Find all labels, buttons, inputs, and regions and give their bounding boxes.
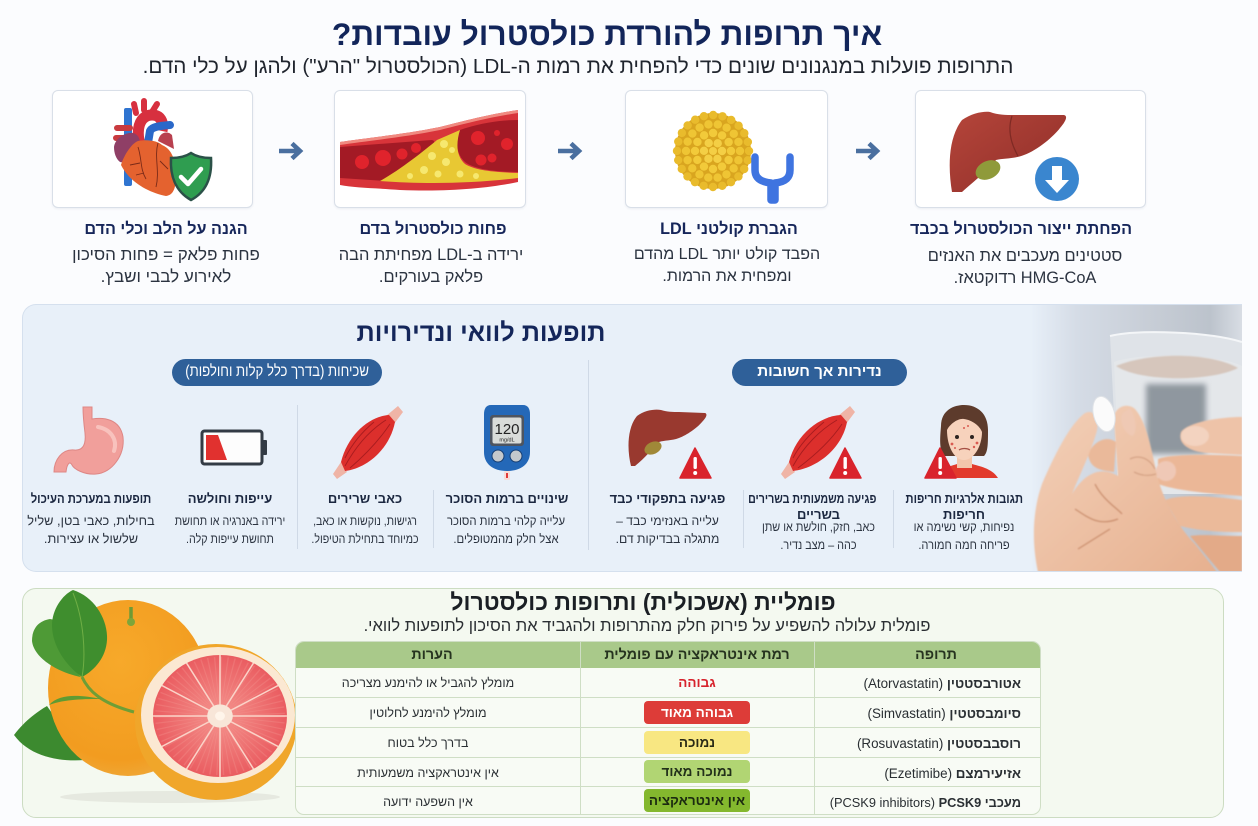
pill: rare	[732, 359, 907, 386]
table: grapefruit interactions: גבוהה	[678, 675, 716, 690]
effect: severe muscle damage text: כאב, חזק, חולשת או שתן	[762, 520, 875, 534]
table: grapefruit interactions: אין אינטראקציה משמעותית	[357, 766, 499, 780]
table: grapefruit interactions: רמת אינטראקציה עם פומלית	[604, 647, 790, 663]
effect: liver text: עלייה באנזימי כבד –	[616, 514, 719, 528]
step 3 text: הפבד קולט יותר LDL מהדם	[634, 246, 820, 263]
icon: glucose meter	[484, 405, 530, 480]
icon: stomach	[54, 406, 124, 475]
effect: allergy text: פריחה חמה חמורה.	[918, 538, 1010, 552]
arrow	[279, 142, 304, 160]
whole orange	[48, 600, 208, 776]
panel: side effects	[22, 304, 1242, 572]
glass	[1110, 332, 1242, 494]
row: ezetimibe: אזיעירמצם (Ezetimibe)	[884, 766, 1021, 781]
panel: grapefruit	[22, 588, 1224, 818]
effect: allergy heading: תגובות אלרגיות חריפות	[905, 491, 1023, 506]
table: grapefruit interactions: הערות	[411, 647, 453, 663]
step 4 text: HMG-CoA רדוקטאז.	[954, 269, 1096, 287]
arrow	[558, 142, 582, 160]
hand	[1034, 406, 1217, 572]
icon: glucose meter: 120	[494, 421, 520, 438]
table: grapefruit interactions: נמוכה	[679, 735, 715, 750]
step 2 text	[339, 246, 523, 286]
step 4 heading: הפחתת ייצור הכולסטרול בכבד	[910, 220, 1132, 238]
step 3 text	[634, 246, 820, 285]
back fingers	[1034, 406, 1242, 572]
grapefruit half	[135, 644, 297, 800]
pill	[1089, 394, 1119, 434]
effect: allergy text: נפיחות, קשי נשימה או	[914, 520, 1014, 534]
row: PCSK9 inhibitors: מעכבי PCSK9 (PCSK9 inhibitors)	[830, 795, 1021, 810]
effect: fatigue text	[175, 514, 285, 546]
table: grapefruit interactions: מומלץ להימנע לחלוטין	[369, 706, 487, 720]
icon: muscle	[333, 406, 403, 479]
subtitle: התרופות פועלות במנגנונים שונים כדי להפחית את רמות ה-LDL (הכולסטרול "הרע") ולהגן על כלי הדם.	[143, 55, 1013, 78]
step 2 text: פלאק בעורקים.	[379, 268, 483, 286]
icon: glucose meter: mg/dL	[499, 438, 515, 444]
effect: severe muscle damage heading	[749, 491, 877, 522]
table: grapefruit interactions: תרופה	[915, 647, 957, 663]
effect: severe muscle damage heading: בשריים	[797, 507, 840, 522]
effect: blood sugar text: עלייה קלהי ברמות הסוכר	[447, 514, 565, 528]
effect: liver heading: פגיעה בתפקודי כבד	[610, 491, 725, 506]
effect: blood sugar heading: שינויים ברמות הסוכר	[446, 491, 568, 506]
step 1 text	[72, 245, 260, 286]
effect: muscle pain text: כמיוחד בתחילת הטיפול.	[311, 532, 419, 546]
row: simvastatin: סיומבסטטין (Simvastatin)	[868, 706, 1021, 721]
step 1 text: פחות פלאק = פחות הסיכון	[72, 245, 260, 264]
icon: artery with plaque	[340, 110, 518, 190]
side effects heading: תופעות לוואי ונדירויות	[357, 319, 605, 347]
icon: liver with warning	[628, 410, 712, 479]
effect: fatigue text: תחושת עייפות קלה.	[186, 532, 274, 546]
step 1 heading: הגנה על הלב וכלי הדם	[84, 220, 248, 238]
effect: allergy heading: חריפות	[943, 507, 985, 522]
effect: muscle pain heading: כאבי שרירים	[328, 491, 402, 506]
table: grapefruit interactions: נמוכה מאוד	[662, 764, 732, 779]
step 3 heading: הגברת קולטני LDL	[660, 220, 798, 238]
grapefruit heading: פומליית (אשכולית) ותרופות כולסטרול	[450, 589, 836, 615]
icon: low battery	[200, 430, 267, 466]
shield	[171, 153, 211, 200]
effect: fatigue heading: עייפות וחולשה	[188, 491, 272, 506]
effect: digestive text: בחילות, כאבי בטן, שליל	[27, 513, 155, 528]
panel: step protect heart	[52, 90, 253, 208]
table: grapefruit interactions	[295, 641, 1041, 815]
step 1 text: לאירוע לבבי ושבץ.	[101, 267, 231, 286]
effect: severe muscle damage heading: פגיעה משמעותית בשרירים	[749, 491, 877, 506]
effect: allergy heading	[905, 491, 1023, 522]
back leaf	[14, 706, 85, 760]
effect: liver text	[616, 514, 719, 546]
icon: liver with down arrow	[950, 112, 1079, 201]
row: rosuvastatin: רוסבבסטטין (Rosuvastatin)	[857, 736, 1021, 751]
icon: LDL particle and receptor	[672, 110, 794, 204]
table header	[296, 642, 1042, 668]
table: grapefruit interactions: אין אינטראקציה	[649, 793, 745, 808]
icon: heart with shield	[113, 98, 212, 202]
step 4 text: סטטינים מעכבים את האנזים	[928, 247, 1122, 265]
panel: step LDL receptors	[625, 90, 828, 208]
effect: muscle pain text: רגישות, נוקשות או כאב,	[313, 514, 417, 528]
effect: digestive text	[27, 513, 155, 546]
illustration: grapefruit	[14, 590, 295, 803]
photo: hand holding pill and glass of water	[1033, 305, 1242, 571]
table: grapefruit interactions: בדרך כלל בטוח	[388, 736, 468, 750]
effect: digestive heading: תופעות במערכת העיכול	[31, 491, 151, 506]
effect: digestive text: שלשול או עצירות.	[44, 531, 138, 546]
effect: blood sugar text	[447, 514, 565, 546]
pill: common	[172, 359, 382, 386]
step 2 heading: פחות כולסטרול בדם	[359, 220, 507, 238]
arrow	[856, 142, 880, 160]
effect: fatigue text: ירידה באנרגיה או תחושת	[175, 514, 285, 528]
icon: face with rash and warning	[924, 405, 998, 479]
effect: blood sugar text: אצל חלק מהמטופלים.	[453, 532, 559, 546]
grapefruit subtitle: פומלית עלולה להשפיע על פירוק חלק מהתרופות ולהגביד את הסיכון לתופעות לוואי.	[364, 617, 930, 635]
panel: step reduce liver production	[915, 90, 1146, 208]
row: atorvastatin: אטורבסטטין (Atorvastatin)	[863, 676, 1021, 691]
effect: muscle pain text	[311, 514, 419, 546]
table: grapefruit interactions: מומלץ להגביל או להימנע מצריכה	[342, 676, 514, 690]
title: איך תרופות להורדת כולסטרול עובדות?	[332, 16, 882, 52]
effect: liver text: מתגלה בבדיקות דם.	[616, 532, 719, 546]
step 2 text: ירידה ב-LDL מפחיתת הבה	[339, 246, 523, 264]
effect: severe muscle damage text	[762, 520, 875, 552]
step 4 text	[928, 247, 1122, 287]
icon: muscle with warning	[781, 406, 862, 479]
effect: severe muscle damage text: כהה – מצב נדיר.	[780, 538, 857, 552]
leaves	[32, 619, 81, 677]
table: grapefruit interactions: אין השפעה ידועה	[383, 795, 473, 809]
step 3 text: ומפחית את הרמות.	[662, 268, 792, 285]
pill: rare: נדירות אך חשובות	[757, 363, 882, 380]
pill: common: שכיחות (בדרך כלל קלות וחולפות)	[185, 363, 369, 380]
panel: step less cholesterol	[334, 90, 526, 208]
effect: allergy text	[914, 520, 1014, 552]
table: grapefruit interactions: גבוהה מאוד	[661, 705, 733, 720]
